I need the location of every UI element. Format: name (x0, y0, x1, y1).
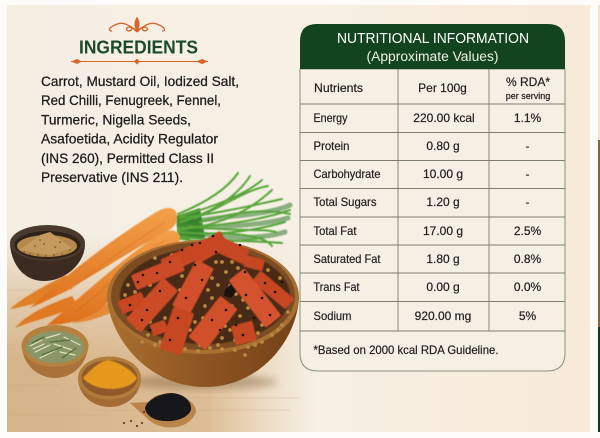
column: % RDA: 0.0% (514, 280, 542, 294)
column: nutrients: Nutrients (314, 81, 363, 95)
ingredients text block: Preservative (INS 211). (41, 169, 183, 185)
column: % RDA: 2.5% (514, 224, 542, 238)
column: per 100g: 220.00 kcal (413, 111, 475, 125)
grid lines (300, 69, 565, 331)
ingredients text block: (INS 260), Permitted Class II (41, 150, 214, 166)
illustration: nigella seeds spoon (124, 393, 196, 427)
column: % RDA: % RDA* (506, 75, 550, 89)
column: % RDA: - (526, 139, 530, 153)
illustration: fennel bowl (22, 325, 88, 378)
column: per 100g: 920.00 mg (415, 309, 471, 323)
column: nutrients: Total Fat (314, 224, 357, 238)
column: nutrients: Total Sugars (314, 195, 376, 209)
column: % RDA: - (526, 195, 530, 209)
table subheading: (Approximate Values) (366, 49, 498, 64)
column: per 100g (413, 81, 475, 323)
ingredients ornament top (109, 18, 165, 32)
column: per 100g: 17.00 g (423, 224, 463, 238)
footnote: *Based on 2000 kcal RDA Guideline. (314, 343, 498, 357)
column: % RDA: - (526, 167, 530, 181)
ingredients text block: Asafoetida, Acidity Regulator (41, 131, 218, 147)
column: nutrients (314, 81, 381, 323)
column: nutrients: Carbohydrate (314, 167, 381, 181)
column: per 100g: 1.80 g (426, 252, 460, 266)
table header band (300, 24, 565, 69)
ingredients ornament bottom (71, 58, 208, 64)
illustration: turmeric bowl (78, 356, 141, 407)
column: per 100g: Per 100g (418, 81, 467, 95)
ingredients text block: Carrot, Mustard Oil, Iodized Salt, (41, 73, 239, 89)
column: nutrients: Energy (314, 111, 348, 125)
table body (300, 69, 565, 371)
column: per 100g: 0.80 g (426, 139, 460, 153)
ingredients text block: Turmeric, Nigella Seeds, (41, 112, 191, 128)
illustration: pickle bowl (107, 231, 299, 389)
black speckles (130, 236, 282, 340)
column: % RDA (506, 75, 550, 323)
column: per 100g: 10.00 g (423, 167, 463, 181)
column: nutrients: Sodium (314, 309, 352, 323)
column: % RDA: 1.1% (514, 111, 542, 125)
illustration: carrot greens (176, 173, 290, 246)
illustration: dark spice bowl (10, 225, 85, 281)
ingredients text block: Red Chilli, Fenugreek, Fennel, (41, 92, 221, 108)
column: nutrients: Protein (314, 139, 350, 153)
column: nutrients: Trans Fat (314, 280, 360, 294)
column: % RDA: 0.8% (514, 252, 542, 266)
pickle pieces (117, 231, 294, 355)
column: nutrients: Saturated Fat (314, 252, 381, 266)
illustration: carrots (10, 208, 180, 328)
title: ingredients: INGREDIENTS (79, 38, 198, 58)
seeds (125, 246, 288, 355)
column: per 100g: 1.20 g (426, 195, 460, 209)
right edge strip (598, 5, 600, 432)
column: % RDA: 5% (519, 309, 537, 323)
column: per 100g: 0.00 g (426, 280, 460, 294)
nutrition table (300, 24, 565, 371)
column: % RDA: per serving (506, 91, 550, 101)
ingredients text block (41, 73, 239, 185)
table cells (314, 75, 550, 323)
table heading: NUTRITIONAL INFORMATION (337, 31, 529, 47)
